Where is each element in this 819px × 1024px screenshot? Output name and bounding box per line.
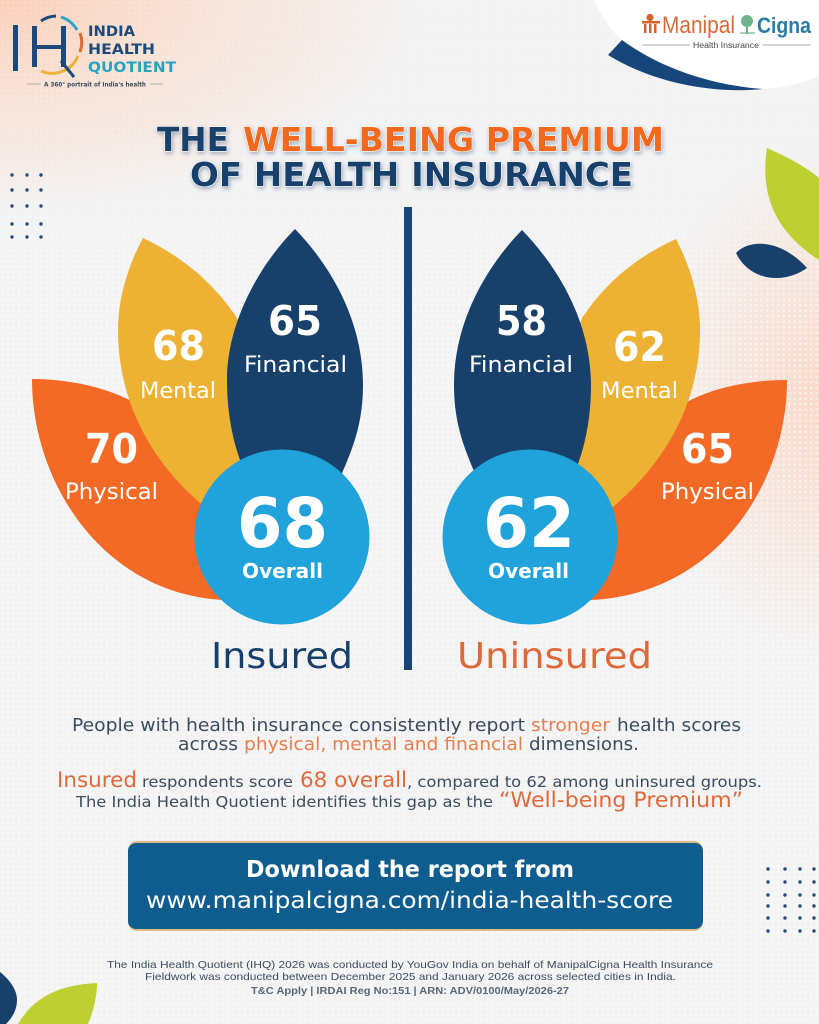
divider between insured and uninsured [404, 207, 412, 670]
button: download the report: Download the report from [246, 857, 574, 883]
logo: India Health Quotient: HEALTH [88, 42, 155, 58]
circle: overall 62: Overall [488, 559, 569, 583]
label: uninsured: Uninsured [457, 636, 652, 677]
petal: mental 62 [550, 239, 700, 520]
petal: physical 65: Physical [661, 480, 754, 505]
petal: financial 65: Financial [244, 353, 347, 378]
text block: stronger health scores: dimensions. [529, 735, 639, 755]
icon: dot grid bottom right [766, 867, 816, 933]
chart: uninsured petals [442, 230, 787, 624]
petal: physical 65: 65 [681, 425, 734, 473]
title: THE [157, 120, 229, 159]
button: download the report [128, 841, 703, 931]
text block: stronger health scores: across [178, 735, 238, 755]
circle: overall 68 [194, 450, 370, 624]
text block: well-being premium gap: The India Health Quotient identifies this gap as the [75, 793, 493, 811]
text block: stronger health scores [72, 716, 741, 755]
logo: India Health Quotient: A 360° portrait of India's health [44, 80, 146, 88]
icon: green leaf bottom left [18, 983, 97, 1024]
footer disclaimer: The India Health Quotient (IHQ) 2026 was conducted by YouGov India on behalf of ManipalCigna Health Insurance [107, 959, 713, 971]
logo: India Health Quotient: INDIA [88, 24, 136, 40]
petal: mental 68 [118, 238, 270, 520]
text block: stronger health scores: People with health insurance consistently report [72, 716, 525, 736]
petal: financial 58: 58 [496, 297, 547, 345]
button: download the report: www.manipalcigna.com/india-health-score [146, 888, 673, 914]
text block: stronger health scores: health scores [617, 716, 741, 736]
text block: well-being premium gap: “Well-being Premium” [499, 788, 743, 812]
label: insured: Insured [211, 636, 353, 677]
icon: navy leaf bottom left [0, 972, 17, 1024]
text block: well-being premium gap [57, 768, 762, 812]
text block: well-being premium gap: , compared to 62 among uninsured groups. [407, 773, 762, 791]
text block: well-being premium gap: respondents score [142, 773, 293, 791]
icon: navy leaf right [736, 244, 807, 278]
chart: insured petals [32, 229, 370, 624]
logo: India Health Quotient: QUOTIENT [88, 60, 176, 76]
title [157, 120, 664, 194]
logo panel: ManipalCigna Health Insurance: Manipal [662, 12, 735, 39]
icon: green leaf top right [765, 148, 819, 260]
icon: dot grid left [10, 173, 43, 239]
petal: mental 62: 62 [613, 323, 666, 371]
footer disclaimer: T&C Apply | IRDAI Reg No:151 | ARN: ADV/0100/May/2026-27 [251, 985, 569, 997]
petal: physical 70: Physical [65, 480, 158, 505]
text block: well-being premium gap: Insured [57, 768, 137, 792]
petal: financial 65: 65 [268, 297, 322, 345]
title: WELL-BEING PREMIUM [243, 120, 664, 159]
footer disclaimer: Fieldwork was conducted between December 2025 and January 2026 across selected cities in India. [145, 971, 676, 983]
circle: overall 68: Overall [242, 559, 323, 583]
text block: stronger health scores: physical, mental and financial [244, 735, 523, 755]
petal: physical 70: 70 [85, 425, 138, 473]
petal: mental 68: 68 [152, 322, 205, 370]
logo panel: ManipalCigna Health Insurance [594, 0, 819, 90]
petal: mental 68: Mental [140, 379, 216, 404]
circle: overall 62: 62 [483, 484, 575, 564]
petal: physical 70 [32, 379, 270, 600]
logo: India Health Quotient [13, 16, 176, 88]
logo panel: ManipalCigna Health Insurance: Cigna [757, 13, 812, 38]
petal: financial 58: Financial [469, 353, 573, 378]
petal: physical 65 [550, 380, 787, 600]
circle: overall 68: 68 [237, 484, 328, 564]
title: OF HEALTH INSURANCE [190, 155, 633, 194]
text block: well-being premium gap: 68 overall [300, 768, 407, 792]
petal: mental 62: Mental [601, 379, 678, 404]
circle: overall 62 [442, 450, 618, 624]
logo panel: ManipalCigna Health Insurance: Health Insurance [693, 41, 760, 50]
text block: stronger health scores: stronger [531, 716, 611, 736]
petal: financial 65 [227, 229, 363, 530]
petal: financial 58 [454, 230, 591, 530]
footer disclaimer [107, 959, 713, 997]
